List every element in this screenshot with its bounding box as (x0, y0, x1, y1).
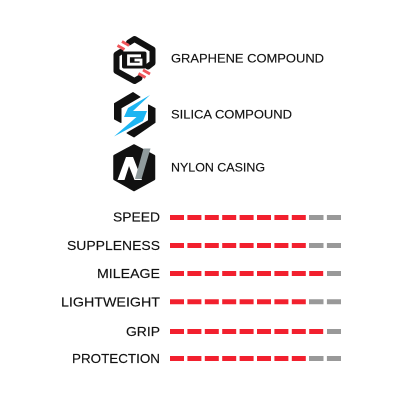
rating bar: suppleness (170, 243, 341, 248)
rating bar: speed (170, 215, 341, 220)
label: lightweight: LIGHTWEIGHT (61, 294, 160, 310)
rating bar: mileage (170, 271, 341, 276)
label: protection: PROTECTION (72, 351, 160, 366)
rating bar: lightweight (170, 299, 341, 304)
heading: nylon casing: NYLON CASING (171, 160, 265, 174)
heading: silica compound: SILICA COMPOUND (171, 108, 292, 122)
rating bar: grip (170, 329, 341, 334)
icon: nylon casing (114, 146, 154, 190)
label: speed: SPEED (113, 210, 160, 224)
label: grip: GRIP (126, 324, 160, 339)
label: suppleness: SUPPLENESS (67, 238, 160, 253)
icon: graphene compound (116, 39, 152, 81)
heading: graphene compound: GRAPHENE COMPOUND (171, 52, 324, 66)
rating bar: protection (170, 356, 341, 361)
label: mileage: MILEAGE (97, 266, 160, 281)
icon: silica compound (114, 92, 155, 137)
